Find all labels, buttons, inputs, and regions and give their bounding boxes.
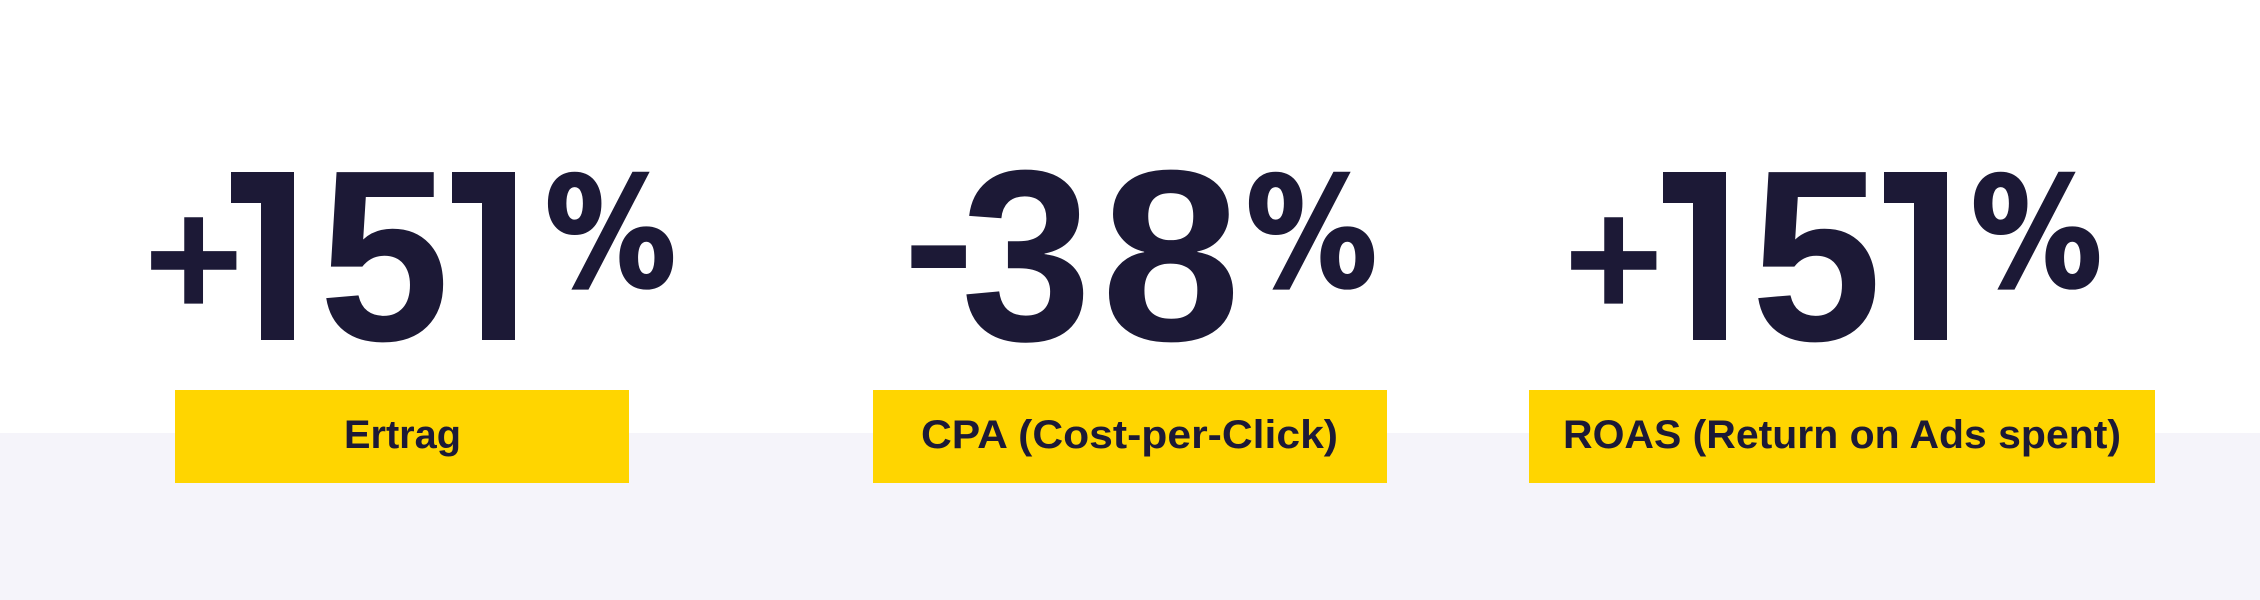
big number: -38% [903,119,1377,392]
big number: +151%: 1 [1633,120,1773,392]
big number: +151% [1571,172,2100,342]
label: ROAS (Return on Ads spent): ROAS (Return on Ads spent) [1563,413,2121,457]
big number: +151%: % [1971,146,2102,322]
panel: Ertrag [151,172,674,483]
panel: ROAS [1529,172,2155,483]
big number: -38%: % [1246,146,1377,322]
big number: +151%: 1 [422,120,562,392]
big number: +151%: 1 [201,120,341,392]
big number: -38%: - [903,134,975,346]
big number: +151%: 5 [319,119,450,392]
big number: +151% [151,172,674,342]
big number: +151%: % [545,146,676,322]
big number: -38%: 8 [1101,120,1241,392]
big number: +151%: 1 [1854,120,1994,392]
label: Ertrag [175,390,629,483]
panel: CPA [873,119,1387,483]
label: Ertrag: Ertrag [344,413,461,457]
label: CPA (Cost-per-Click) [873,390,1387,483]
big number: +151%: + [144,164,243,354]
label: CPA (Cost-per-Click): CPA (Cost-per-Click) [921,413,1338,457]
big number: +151%: 5 [1751,119,1882,392]
big number: -38%: 3 [961,119,1092,392]
big number: +151%: + [1564,164,1663,354]
label: ROAS (Return on Ads spent) [1529,390,2155,483]
